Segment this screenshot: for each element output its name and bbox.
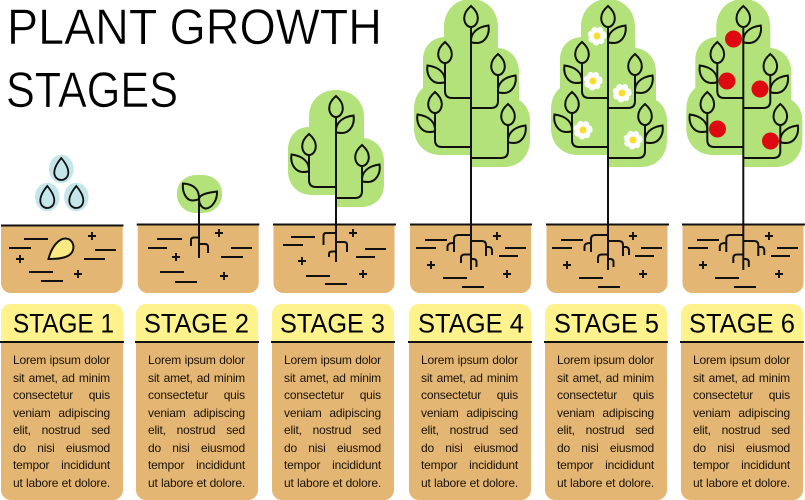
text block: stage 3: Lorem ipsum dolor bbox=[284, 353, 381, 367]
sprout stem, leaves and roots bbox=[183, 184, 217, 258]
heading: stage 4: STAGE 4 bbox=[418, 308, 524, 338]
text block: stage 4: do nisi eiusmod bbox=[421, 440, 518, 454]
panel: stage 2 bbox=[135, 304, 259, 500]
text block: stage 4: veniam adipiscing bbox=[421, 406, 518, 420]
panel: stage 6 bbox=[680, 304, 804, 500]
text block: stage 3: elit, nostrud sed bbox=[284, 423, 381, 437]
text block: stage 2: tempor incididunt bbox=[148, 458, 245, 472]
text block: stage 5 bbox=[557, 353, 654, 490]
heading: stage 6: STAGE 6 bbox=[689, 308, 795, 338]
text block: stage 6: sit amet, ad minim bbox=[693, 370, 790, 384]
text block: stage 2: sit amet, ad minim bbox=[148, 370, 245, 384]
text block: stage 3: consectetur quis bbox=[284, 388, 381, 402]
heading: stage 1: STAGE 1 bbox=[13, 308, 114, 338]
stage 2 soil with sprout bbox=[137, 175, 259, 293]
young plant foliage bbox=[288, 90, 384, 207]
text block: stage 4: elit, nostrud sed bbox=[421, 423, 518, 437]
text block: stage 2: veniam adipiscing bbox=[148, 406, 245, 420]
young plant branches and leaves bbox=[291, 96, 380, 262]
text block: stage 5: veniam adipiscing bbox=[557, 406, 654, 420]
text block: stage 1: Lorem ipsum dolor bbox=[13, 353, 110, 367]
text block: stage 4: sit amet, ad minim bbox=[421, 370, 518, 384]
fruits bbox=[709, 30, 779, 150]
text block: stage 6: Lorem ipsum dolor bbox=[693, 353, 790, 367]
panel: stage 1 bbox=[0, 304, 124, 500]
fruiting tree branches, leaves and roots bbox=[690, 6, 798, 270]
flowering tree branches, leaves and roots bbox=[554, 6, 663, 270]
text block: stage 5: tempor incididunt bbox=[557, 458, 654, 472]
panel: stage 5 bbox=[544, 304, 668, 500]
text block: stage 1: ut labore et dolore. bbox=[13, 476, 110, 490]
text block: stage 4: Lorem ipsum dolor bbox=[421, 353, 518, 367]
text block: stage 4: ut labore et dolore. bbox=[421, 476, 518, 490]
text block: stage 2: consectetur quis bbox=[148, 388, 245, 402]
text block: stage 5: ut labore et dolore. bbox=[557, 476, 654, 490]
text block: stage 1: consectetur quis bbox=[13, 388, 110, 402]
text block: stage 6: do nisi eiusmod bbox=[693, 440, 790, 454]
text block: stage 2 bbox=[148, 353, 246, 490]
stage 5 soil with flowering tree bbox=[546, 0, 669, 293]
text block: stage 5: sit amet, ad minim bbox=[557, 370, 654, 384]
text block: stage 3: ut labore et dolore. bbox=[284, 476, 381, 490]
text block: stage 6: veniam adipiscing bbox=[693, 406, 790, 420]
text block: stage 5: Lorem ipsum dolor bbox=[557, 353, 654, 367]
text block: stage 6: tempor incididunt bbox=[693, 458, 790, 472]
text block: stage 2: do nisi eiusmod bbox=[148, 440, 245, 454]
text block: stage 6: consectetur quis bbox=[693, 388, 790, 402]
icon: seed bbox=[48, 238, 73, 259]
text block: stage 5: elit, nostrud sed bbox=[557, 423, 654, 437]
text block: stage 1: veniam adipiscing bbox=[13, 406, 110, 420]
text block: stage 1 bbox=[13, 353, 110, 490]
text block: stage 1: elit, nostrud sed bbox=[13, 423, 110, 437]
text block: stage 1: sit amet, ad minim bbox=[13, 370, 110, 384]
text block: stage 5: do nisi eiusmod bbox=[557, 440, 654, 454]
text block: stage 2: elit, nostrud sed bbox=[148, 423, 245, 437]
icon: water drops bbox=[35, 155, 89, 211]
tree foliage bbox=[414, 0, 530, 167]
title bbox=[6, 0, 382, 118]
text block: stage 5: consectetur quis bbox=[557, 388, 654, 402]
text block: stage 6: ut labore et dolore. bbox=[693, 476, 790, 490]
text block: stage 2: ut labore et dolore. bbox=[148, 476, 245, 490]
text block: stage 1: do nisi eiusmod bbox=[13, 440, 110, 454]
text block: stage 6 bbox=[693, 353, 790, 490]
tree branches, leaves and roots bbox=[417, 6, 526, 270]
text block: stage 4 bbox=[421, 353, 518, 490]
text block: stage 4: consectetur quis bbox=[421, 388, 518, 402]
heading: stage 3: STAGE 3 bbox=[280, 308, 385, 338]
text block: stage 3: tempor incididunt bbox=[284, 458, 381, 472]
title: PLANT GROWTH bbox=[7, 0, 382, 55]
text block: stage 3: veniam adipiscing bbox=[284, 406, 381, 420]
heading: stage 5: STAGE 5 bbox=[554, 308, 659, 338]
sprout foliage bbox=[177, 175, 222, 213]
text block: stage 4: tempor incididunt bbox=[421, 458, 518, 472]
panel: stage 3 bbox=[271, 304, 395, 500]
stage 3 soil with young plant bbox=[273, 90, 396, 293]
fruiting tree foliage bbox=[686, 0, 802, 167]
text block: stage 2: Lorem ipsum dolor bbox=[148, 353, 245, 367]
text block: stage 6: elit, nostrud sed bbox=[693, 423, 790, 437]
text block: stage 3: sit amet, ad minim bbox=[284, 370, 381, 384]
stage 4 soil with tree bbox=[410, 0, 532, 293]
text block: stage 1: tempor incididunt bbox=[13, 458, 110, 472]
text block: stage 3 bbox=[284, 353, 382, 490]
stage 1 soil with seed bbox=[1, 225, 124, 293]
stage 6 soil with fruiting tree bbox=[682, 0, 805, 293]
flowers bbox=[577, 30, 639, 146]
flowering tree foliage bbox=[551, 0, 667, 167]
heading: stage 2: STAGE 2 bbox=[144, 308, 249, 338]
panel: stage 4 bbox=[408, 304, 532, 500]
title: STAGES bbox=[6, 62, 178, 118]
text block: stage 3: do nisi eiusmod bbox=[284, 440, 381, 454]
